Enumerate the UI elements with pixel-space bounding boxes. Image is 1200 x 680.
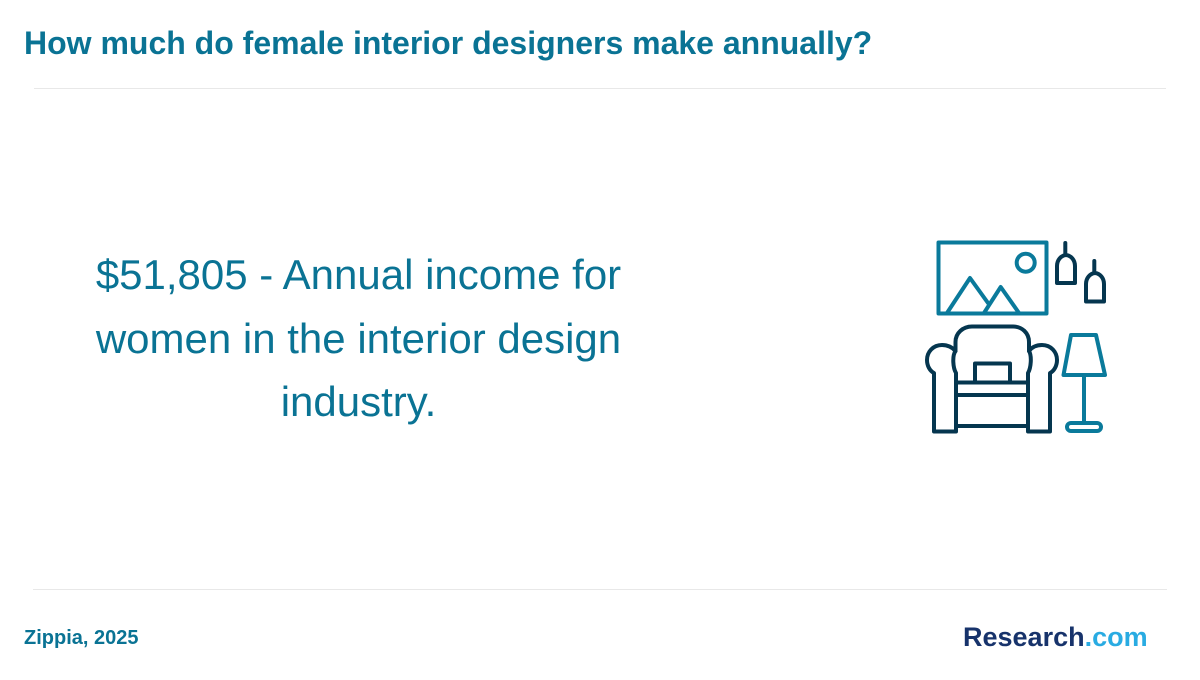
- icon: pendant lights: [1057, 243, 1104, 302]
- main statistic text: $51,805 - Annual income for: [96, 251, 621, 298]
- icon: living room with armchair, picture, pendant lights and floor lamp: [925, 240, 1107, 434]
- source label: Zippia, 2025: [24, 627, 138, 649]
- logo: Research.com: Research.com: [963, 622, 1148, 652]
- main statistic text: women in the interior design: [96, 314, 621, 362]
- title: How much do female interior designers make annually?: [24, 25, 872, 61]
- icon: framed picture: [938, 242, 1046, 314]
- icon: armchair: [927, 326, 1057, 432]
- icon: floor lamp: [1064, 335, 1105, 431]
- main statistic text: industry.: [281, 378, 436, 425]
- main statistic text: [96, 251, 621, 425]
